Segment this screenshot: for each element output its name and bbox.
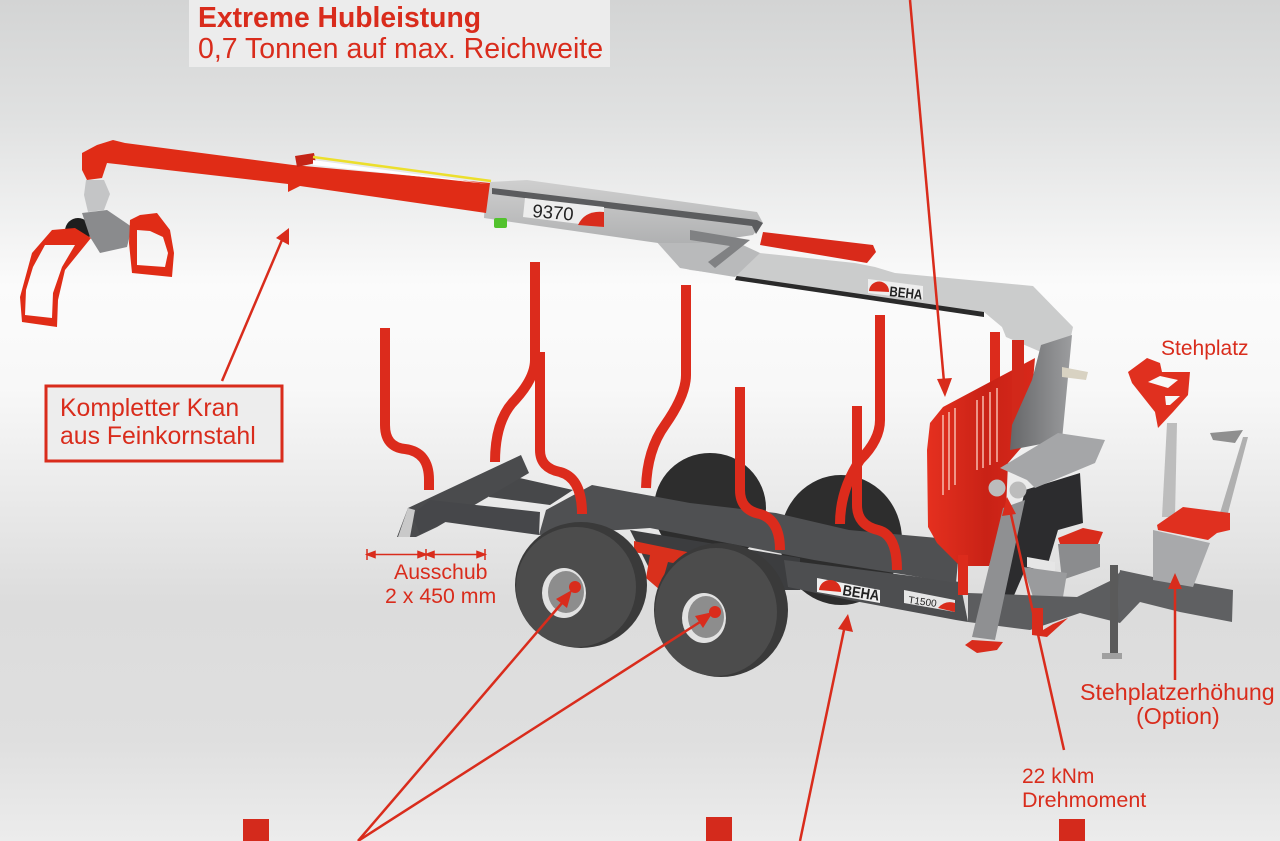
callout: Kompletter Kran: Kompletter Kran bbox=[60, 395, 239, 422]
front wheel left bbox=[515, 522, 647, 648]
standing platform bbox=[1128, 358, 1248, 587]
hood bbox=[1000, 433, 1105, 488]
grille: light stripes bbox=[943, 388, 997, 495]
far stakes bbox=[495, 262, 880, 524]
label: Stehplatz: Stehplatz bbox=[1161, 337, 1249, 360]
crane: link lever bbox=[690, 230, 750, 268]
crane column bbox=[1010, 335, 1072, 450]
trailer: red axle bbox=[634, 541, 692, 590]
rear wheel two bbox=[780, 475, 902, 605]
trailer: rear plate bbox=[398, 508, 415, 537]
crane: model plate 9370 bbox=[523, 198, 604, 227]
crane: grapple body bbox=[82, 210, 132, 253]
arrow: platform raise bbox=[1168, 573, 1182, 680]
arrow: torque bbox=[1002, 497, 1064, 750]
trailer: red lower post bbox=[958, 555, 968, 595]
crane: grapple right claw bbox=[129, 213, 174, 277]
trailer: BEHA logo: BEHA bbox=[841, 582, 881, 605]
heading: Extreme Hubleistung bbox=[189, 0, 610, 67]
crane: model plate 9370: 9370 bbox=[532, 200, 574, 225]
heading: Extreme Hubleistung: 0,7 Tonnen auf max. Reichweite bbox=[198, 33, 603, 65]
trailer: bed bbox=[539, 485, 960, 583]
crane: grapple left claw bbox=[20, 228, 91, 327]
heading: Extreme Hubleistung: Extreme Hubleistung bbox=[198, 1, 481, 33]
crane: bracket bbox=[295, 153, 316, 167]
platform post bbox=[1162, 423, 1177, 517]
red box top bbox=[1058, 528, 1103, 544]
crane: green valve bbox=[494, 218, 507, 228]
trailer: near beam bbox=[412, 500, 540, 535]
trailer: side beam bbox=[784, 560, 968, 622]
foot plate bbox=[965, 640, 1003, 653]
trailer: rear crossbar bbox=[397, 455, 529, 537]
column bracket bbox=[1062, 367, 1088, 380]
label: Drehmoment bbox=[1022, 765, 1146, 812]
rotary cylinders bbox=[988, 480, 1026, 498]
near stakes bbox=[385, 328, 897, 570]
grey box bbox=[1058, 544, 1100, 580]
crane: steel boom bbox=[484, 180, 763, 243]
support leg bbox=[972, 500, 1025, 640]
trailer bbox=[385, 262, 1233, 677]
trailer: BEHA logo bbox=[817, 578, 881, 605]
label: Stehplatzerhöhung bbox=[1080, 679, 1275, 729]
rear wheel one bbox=[654, 453, 766, 563]
label: Ausschub: 2 x 450 mm bbox=[385, 584, 496, 608]
callout: Kompletter Kran bbox=[46, 386, 282, 461]
platform seat bbox=[1128, 358, 1190, 428]
crane: boom dark top band bbox=[492, 188, 763, 234]
platform rail bbox=[1220, 437, 1248, 513]
trailer: red front grille bbox=[927, 358, 1035, 566]
crane: lower steel body bbox=[655, 225, 760, 277]
label: Stehplatzerhöhung: Stehplatzerhöhung bbox=[1080, 679, 1275, 705]
crane: rotator bbox=[84, 180, 110, 212]
crane: hydraulic cylinder bbox=[760, 232, 876, 263]
label: Stehplatzerhöhung: (Option) bbox=[1136, 703, 1220, 729]
platform step bbox=[1157, 507, 1230, 540]
label: Ausschub bbox=[367, 549, 496, 608]
crane: grapple disc bbox=[65, 218, 91, 244]
trailer: under frame bbox=[630, 530, 800, 590]
red hitch bbox=[1032, 608, 1068, 637]
trailer: red post behind grille bbox=[990, 332, 1000, 400]
arrow: grille bbox=[910, 0, 952, 397]
trailer: T1500 plate: T1500 bbox=[908, 595, 938, 610]
platform grey box bbox=[1153, 530, 1210, 587]
arrows: wheels bbox=[358, 590, 713, 841]
crane: black underside strip bbox=[735, 275, 984, 317]
white plate bbox=[1027, 557, 1055, 573]
callout: Kompletter Kran: aus Feinkornstahl bbox=[60, 423, 256, 450]
label: Drehmoment: Drehmoment bbox=[1022, 788, 1146, 812]
label: Ausschub: Ausschub bbox=[394, 560, 488, 584]
arrow: crane bbox=[222, 228, 289, 381]
crane: red extension bbox=[82, 140, 490, 213]
dark pedestal bbox=[1000, 473, 1083, 600]
crane: BEHA logo: BEHA bbox=[889, 283, 923, 302]
label: Drehmoment: 22 kNm bbox=[1022, 765, 1094, 788]
arrow: frame bbox=[800, 614, 853, 841]
drawbar bbox=[1117, 570, 1233, 623]
trailer: T1500 plate bbox=[904, 590, 955, 612]
crane: rear steel arm bbox=[678, 252, 1073, 360]
red square markers bbox=[243, 817, 1085, 841]
trailer: far beam bbox=[489, 472, 573, 505]
front centre frame bbox=[968, 572, 1120, 630]
crane bbox=[20, 140, 1073, 360]
crane: yellow hose bbox=[313, 157, 491, 181]
platform back seat bbox=[1210, 430, 1243, 443]
jack stand bbox=[1102, 565, 1122, 659]
crane: BEHA logo bbox=[868, 279, 923, 302]
front wheel right bbox=[654, 543, 788, 677]
crane: red stem bbox=[1012, 340, 1024, 435]
lower box bbox=[1023, 567, 1067, 597]
